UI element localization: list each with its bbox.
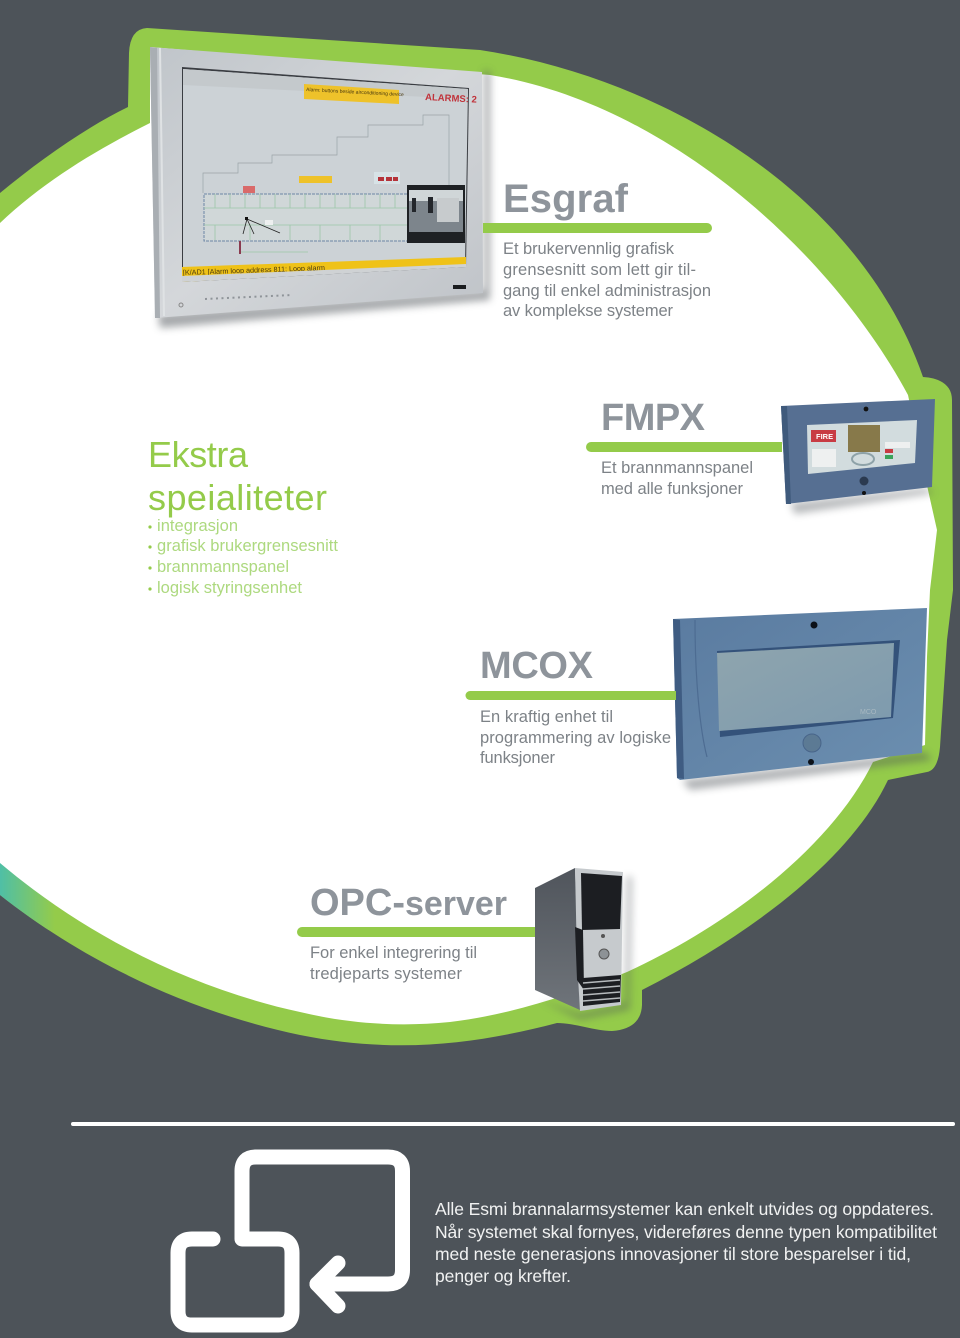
text: footer paragraph: Når systemet skal fornyes, videreføres denne typen kompatibilitet bbox=[435, 1222, 937, 1242]
heading: FMPX bbox=[586, 397, 782, 452]
text: Esgraf description: av komplekse systemer bbox=[503, 302, 674, 320]
text: FMPX description: med alle funksjoner bbox=[601, 480, 744, 498]
device: MCOX panel bbox=[673, 608, 932, 790]
heading: FMPX: FMPX bbox=[601, 397, 706, 439]
text: Esgraf description: Et brukervennlig grafisk bbox=[503, 240, 675, 258]
text: FMPX description: Et brannmannspanel bbox=[601, 459, 753, 477]
device: MCOX panel: MCO bbox=[860, 709, 877, 716]
screen content: Alarm: buttons beside airconditioning device bbox=[306, 87, 404, 98]
text: FMPX description bbox=[601, 459, 753, 498]
heading: OPC-server: server bbox=[405, 885, 507, 923]
list: special features bbox=[148, 517, 338, 597]
text: footer paragraph bbox=[435, 1199, 937, 1286]
device: FMPX panel bbox=[781, 399, 935, 514]
text: Esgraf description: grensesnitt som lett gir til- bbox=[503, 261, 696, 279]
text: MCOX description: programmering av logiske bbox=[480, 729, 671, 747]
screen content: [K/AD1 [Alarm loop address 811: Loop alarm bbox=[183, 263, 325, 277]
icon: migration between systems bbox=[178, 1157, 402, 1325]
text: MCOX description: funksjoner bbox=[480, 749, 556, 767]
list: special features: grafisk brukergrensesnitt bbox=[157, 537, 338, 555]
screen content bbox=[182, 69, 477, 282]
list: special features: integrasjon bbox=[157, 517, 238, 535]
text: OPC-server description: For enkel integrering til bbox=[310, 944, 477, 962]
list: special features: logisk styringsenhet bbox=[157, 579, 302, 597]
heading: MCOX bbox=[466, 645, 676, 700]
text: OPC-server description: tredjeparts systemer bbox=[310, 965, 462, 983]
device: FMPX panel: FIRE bbox=[816, 432, 833, 441]
list: special features: brannmannspanel bbox=[157, 558, 289, 576]
heading: OPC-server: OPC- bbox=[310, 882, 405, 924]
heading: Ekstra spesialiteter: speialiteter bbox=[148, 477, 327, 518]
green-framed white blob bbox=[0, 28, 953, 1045]
text: OPC-server description bbox=[310, 944, 477, 983]
heading: Esgraf bbox=[483, 177, 712, 233]
device: OPC server tower bbox=[535, 868, 632, 1020]
heading: MCOX: MCOX bbox=[480, 645, 594, 687]
text: Esgraf description bbox=[503, 240, 711, 320]
text: footer paragraph: Alle Esmi brannalarmsystemer kan enkelt utvides og oppdateres. bbox=[435, 1199, 934, 1219]
text: footer paragraph: penger og krefter. bbox=[435, 1266, 571, 1286]
heading: Esgraf: Esgraf bbox=[503, 177, 629, 221]
text: MCOX description: En kraftig enhet til bbox=[480, 708, 613, 726]
divider line bbox=[71, 1122, 955, 1126]
text: footer paragraph: med neste generasjons innovasjoner til store besparelser i tid, bbox=[435, 1244, 911, 1264]
text: MCOX description bbox=[480, 708, 671, 767]
text: Esgraf description: gang til enkel administrasjon bbox=[503, 282, 711, 300]
device: monitor with Esgraf screen bbox=[150, 47, 490, 328]
heading: Ekstra spesialiteter: Ekstra bbox=[148, 434, 249, 475]
heading: Ekstra spesialiteter bbox=[148, 434, 327, 518]
heading: OPC-server bbox=[297, 882, 535, 937]
screen content: ALARMS: 2 bbox=[425, 92, 477, 106]
